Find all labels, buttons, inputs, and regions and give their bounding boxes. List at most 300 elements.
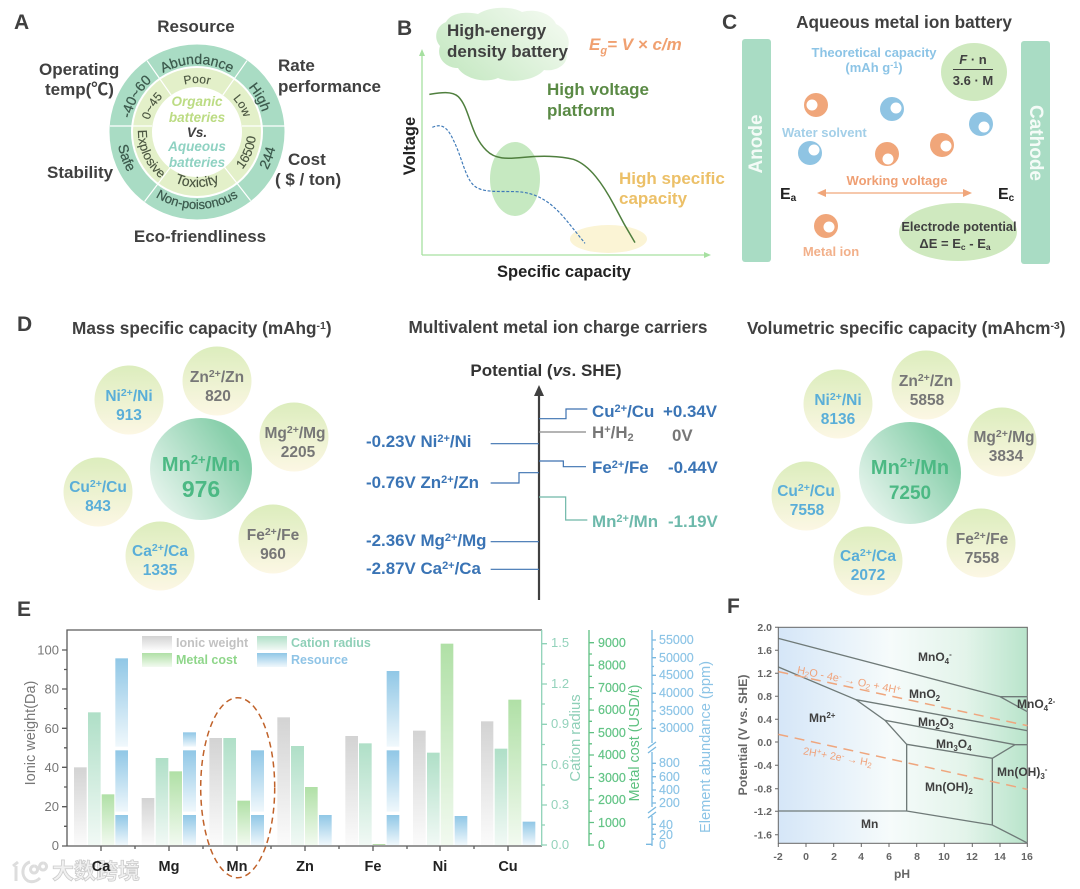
ring category labels: performance (278, 77, 381, 96)
panel C: aqueous battery (722, 11, 1050, 264)
mass capacity bubbles: /Mg (299, 425, 326, 442)
phase labels: 4 (945, 657, 950, 666)
element abundance axis: 600 (659, 770, 680, 784)
ring category labels (39, 17, 381, 246)
mass capacity bubbles: 2+ (265, 526, 277, 538)
panel B: voltage curve (397, 8, 725, 281)
electrode labels: E (998, 186, 1009, 203)
working voltage arrow: Working voltage (847, 173, 947, 188)
volumetric capacity bubbles: /Fe (986, 531, 1009, 548)
volumetric capacity title: Volumetric specific capacity (mAhcm (747, 318, 1050, 338)
mass capacity bubbles: /Ca (164, 543, 188, 560)
potential labels: 2+ (612, 459, 624, 471)
potential labels: 2+ (616, 513, 629, 525)
potential labels: 0V (672, 426, 693, 445)
legend: Cation radius (291, 636, 371, 650)
potential labels: -2.36V Mg (366, 531, 445, 550)
mass capacity bubbles: 843 (85, 498, 111, 515)
phase labels: 2 (935, 722, 940, 731)
volumetric capacity bubbles: 2+ (798, 482, 810, 494)
element abundance axis: 0 (659, 838, 666, 852)
ring chart (110, 44, 284, 220)
cation radius axis: Cation radius (568, 694, 584, 782)
ring chart: Poor (184, 75, 211, 84)
x tick labels: 8 (914, 851, 920, 863)
mass capacity title: -1 (317, 320, 326, 332)
phase labels: 2 (968, 787, 973, 796)
axis titles (736, 675, 910, 881)
plot background (778, 627, 1027, 843)
cation radius axis: 0.6 (551, 757, 569, 772)
x axis labels: Mn (227, 859, 247, 875)
y tick labels: 1.2 (757, 668, 772, 680)
cation radius axis: 0.0 (551, 837, 569, 852)
mass capacity bubbles: 2205 (281, 444, 316, 461)
mass capacity bubbles: /Zn (221, 369, 244, 386)
volumetric capacity bubbles: 5858 (910, 392, 945, 409)
panel A: comparison ring (14, 11, 381, 246)
panel D: capacities and potentials (17, 313, 1066, 600)
phase labels: 3 (953, 744, 958, 753)
working voltage arrow (817, 173, 972, 197)
potential labels: 2+ (615, 403, 627, 415)
mass capacity bubbles: Mg (264, 425, 287, 442)
volumetric capacity bubbles: 2+ (918, 372, 930, 384)
watermark (13, 859, 140, 884)
watermark: 大数跨境 (52, 859, 140, 884)
ring centre text (167, 94, 226, 170)
ring chart: 0~45 (142, 92, 162, 119)
axis titles: Potential (V vs. SHE) (736, 675, 750, 795)
mass capacity bubbles: 820 (205, 388, 231, 405)
panel letter A: A (14, 11, 29, 34)
mass capacity bubbles: Cu (69, 479, 90, 496)
element abundance axis: 35000 (659, 704, 694, 718)
potential labels: -0.23V Ni (366, 432, 437, 451)
potential labels: +0.34V (663, 402, 718, 421)
mass capacity bubbles: /Mn (206, 454, 240, 476)
reaction labels: + 2e (820, 749, 843, 764)
ring category labels: ( $ / ton) (275, 170, 341, 189)
axis titles: Specific capacity (497, 263, 632, 281)
volumetric capacity bubbles: 7558 (965, 550, 1000, 567)
y tick labels: 0.8 (757, 691, 772, 703)
volumetric capacity bubbles: Ca (840, 548, 860, 565)
element abundance axis: 200 (659, 796, 680, 810)
phase labels: - (949, 650, 952, 659)
ring chart: High (249, 82, 270, 112)
theoretical capacity: (mAh g (845, 60, 890, 75)
curve labels: platform (547, 101, 615, 120)
volumetric capacity bubbles: 7558 (790, 502, 825, 519)
formula bubble (941, 43, 1007, 101)
volumetric capacity bubbles: 2+ (830, 391, 842, 403)
left axis labels (23, 642, 59, 853)
mass capacity bubbles: 913 (116, 407, 142, 424)
mass capacity bubbles: 1335 (143, 562, 178, 579)
y tick labels: -0.4 (754, 760, 772, 772)
mass capacity bubbles: Mn (162, 454, 191, 476)
x axis labels: Zn (296, 859, 314, 875)
potential labels (366, 402, 718, 578)
y tick labels: 0.0 (757, 737, 772, 749)
y tick labels: 1.6 (757, 645, 772, 657)
panel title: Aqueous metal ion battery (796, 12, 1012, 32)
ring chart: Low (234, 94, 250, 116)
potential labels: /Mn (629, 512, 658, 531)
electrode labels: E (780, 186, 791, 203)
potential labels: -1.19V (668, 512, 718, 531)
axes (419, 49, 711, 258)
reaction labels (796, 663, 902, 770)
mass capacity bubbles: Zn (190, 369, 209, 386)
ring centre text: Vs. (187, 125, 207, 140)
mass capacity bubbles: /Cu (102, 479, 127, 496)
left axis labels: 80 (45, 682, 59, 696)
ring category labels: Eco-friendliness (134, 227, 266, 246)
x tick labels: 14 (994, 851, 1006, 863)
volumetric capacity bubbles: /Mg (1008, 429, 1035, 446)
phase labels: 2+ (826, 711, 836, 720)
y tick labels: -1.2 (754, 806, 772, 818)
metal cost axis: 4000 (598, 748, 626, 762)
legend: Ionic weight (176, 636, 249, 650)
volumetric capacity bubbles: Fe (956, 531, 974, 548)
volumetric capacity bubbles: /Zn (930, 373, 953, 390)
metal cost axis: 9000 (598, 636, 626, 650)
mass capacity bubbles: Ni (105, 388, 121, 405)
anode (742, 39, 771, 262)
volumetric capacity bubbles: 2072 (851, 567, 885, 584)
cathode: Cathode (1025, 105, 1046, 181)
x axis labels: Ni (433, 859, 447, 875)
metal ion label: Metal ion (803, 244, 859, 259)
element abundance axis: 55000 (659, 633, 694, 647)
ring chart: Toxicity (178, 174, 218, 188)
y tick labels: 2.0 (757, 622, 772, 634)
potential labels: /H (611, 423, 628, 442)
x tick labels: -2 (773, 851, 783, 863)
y tick labels (754, 622, 772, 842)
phase labels (809, 650, 1056, 831)
ring category labels: temp(℃) (45, 80, 114, 99)
left axis labels: 60 (45, 721, 59, 736)
reaction labels: O - 4e (808, 667, 840, 685)
ring centre text: batteries (169, 110, 226, 125)
panel letter F: F (727, 595, 740, 618)
panel letter C: C (722, 11, 737, 34)
x tick labels: 2 (831, 851, 837, 863)
phase labels: O (940, 715, 949, 729)
formula: = V × c/m (607, 35, 682, 54)
cation radius axis: 0.9 (551, 716, 569, 731)
mass capacity bubbles: 2+ (152, 542, 164, 554)
axis ticks (775, 627, 1027, 847)
volumetric capacity bubbles: 2+ (974, 530, 986, 542)
phase labels: MnO (909, 687, 936, 701)
volumetric capacity bubbles: /Mn (915, 457, 949, 479)
volumetric capacity bubbles: 2+ (996, 428, 1008, 440)
x tick labels: 4 (858, 851, 864, 863)
blue dashed curve (432, 126, 585, 243)
electrode potential bubble (899, 203, 1017, 261)
left axis labels: 0 (52, 838, 59, 853)
ring chart: 244 (260, 147, 276, 170)
cathode (1021, 41, 1050, 264)
panel E: bar chart (17, 598, 714, 878)
left axis labels: 20 (45, 799, 59, 814)
cation radius axis: 0.3 (551, 797, 569, 812)
potential labels: /Ni (450, 432, 472, 451)
potential labels: 2+ (442, 560, 455, 572)
ring centre text: batteries (169, 155, 226, 170)
formula bubble: F · n (959, 52, 987, 67)
potential axis title: Potential (vs. SHE) (470, 361, 622, 380)
mass capacity bubbles (64, 346, 328, 590)
cloud text: density battery (447, 42, 568, 61)
mass capacity bubbles: 2+ (287, 424, 299, 436)
electrode labels (780, 186, 1015, 204)
phase labels: 2 (936, 694, 941, 703)
ring chart: Explosive (137, 130, 164, 178)
metal cost axis: Metal cost (USD/t) (627, 685, 643, 801)
mass capacity bubbles: 2+ (90, 478, 102, 490)
mass capacity bubbles: 2+ (191, 452, 206, 467)
reaction labels: → O (840, 673, 867, 690)
cation radius axis (542, 630, 584, 852)
phase labels: Mn (809, 711, 826, 725)
phase labels: 4 (967, 744, 972, 753)
legend: Resource (291, 653, 348, 667)
ring category labels: Cost (288, 150, 326, 169)
metal cost axis: 6000 (598, 703, 626, 717)
volumetric capacity bubbles: Zn (899, 373, 918, 390)
electrode labels: c (1009, 193, 1015, 204)
mass capacity bubbles: /Fe (277, 527, 300, 544)
curve labels (547, 80, 725, 208)
reaction labels: + (896, 683, 902, 693)
cloud text (447, 21, 568, 61)
potential labels: -0.76V Zn (366, 473, 441, 492)
volumetric capacity bubbles: /Ni (842, 392, 862, 409)
metal cost axis: 3000 (598, 771, 626, 785)
potential labels: 2+ (441, 474, 454, 486)
theoretical capacity (812, 45, 937, 75)
green solid curve (429, 93, 635, 243)
phase labels: Mn (936, 737, 953, 751)
volumetric capacity title: ) (1060, 318, 1066, 338)
reaction labels: + (816, 747, 823, 757)
ring chart: Safe (118, 144, 134, 172)
chart frame and ticks (62, 630, 542, 851)
mass capacity title: Mass specific capacity (mAhg (72, 318, 317, 338)
volumetric capacity bubbles: Mg (973, 429, 996, 446)
panel letter B: B (397, 17, 412, 40)
ring chart: 16500 (237, 136, 256, 169)
formula: E (589, 35, 600, 54)
curve labels: High specific (619, 169, 725, 188)
reaction labels: 2 (866, 761, 873, 770)
phase labels: MnO (918, 650, 945, 664)
phase labels: Mn(OH) (997, 765, 1040, 779)
potential labels: -2.87V Ca (366, 559, 442, 578)
metal cost axis: 5000 (598, 726, 626, 740)
volumetric capacity bubbles: 2+ (900, 455, 915, 470)
potential labels: /Mg (457, 531, 486, 550)
reaction labels: + 4H (869, 679, 897, 696)
water solvent label: Water solvent (782, 125, 867, 140)
legend: Metal cost (176, 653, 238, 667)
potential labels: /Cu (627, 402, 654, 421)
element abundance axis: 50000 (659, 651, 694, 665)
phase labels: 2- (1048, 697, 1056, 706)
formula bubble: 3.6 · M (953, 73, 993, 88)
theoretical capacity: -1 (890, 60, 898, 70)
ring chart: Non-poisonous (156, 190, 238, 211)
y tick labels: -1.6 (754, 830, 772, 842)
x tick labels: 16 (1021, 851, 1033, 863)
mass capacity title: ) (326, 318, 332, 338)
electrode potential bubble: c (961, 242, 966, 252)
theoretical capacity: ) (898, 60, 903, 75)
mass capacity bubbles: Ca (132, 543, 152, 560)
x tick labels: 6 (886, 851, 892, 863)
axis titles: pH (894, 867, 910, 881)
potential labels: -0.44V (668, 458, 718, 477)
potential labels: Fe (592, 458, 612, 477)
volumetric capacity bubbles: 2+ (860, 547, 872, 559)
phase labels: Mn (861, 817, 878, 831)
potential labels: /Ca (455, 559, 482, 578)
panel letter D: D (17, 313, 32, 336)
phase labels: 4 (1044, 704, 1049, 713)
element abundance axis: 40000 (659, 686, 694, 700)
bars (74, 644, 535, 845)
metal cost axis: 1000 (598, 816, 626, 830)
left axis labels: Ionic weight(Da) (23, 681, 39, 785)
mass capacity bubbles: 976 (182, 476, 220, 502)
cation radius axis: 1.2 (551, 676, 569, 691)
potential labels: H (592, 423, 604, 442)
metal cost axis: 8000 (598, 658, 626, 672)
mass capacity bubbles: /Ni (133, 388, 153, 405)
ring chart: -40~60 (124, 76, 150, 118)
potential labels: + (604, 424, 611, 436)
ions and water (798, 93, 993, 238)
curve labels: capacity (619, 189, 688, 208)
legend (142, 636, 371, 667)
anode: Anode (746, 114, 767, 174)
volumetric capacity bubbles: 8136 (821, 411, 856, 428)
cloud (436, 8, 569, 81)
curve labels: High voltage (547, 80, 649, 99)
element abundance axis: 20 (659, 828, 673, 842)
metal cost axis (589, 630, 643, 852)
ring centre text: Organic (171, 94, 223, 109)
potential labels: 2 (628, 432, 634, 444)
element abundance axis: 45000 (659, 668, 694, 682)
phase labels: MnO (1017, 697, 1044, 711)
electrode potential bubble: a (986, 242, 991, 252)
reaction labels: 2 (804, 670, 810, 680)
potential labels: 2+ (445, 532, 457, 544)
ring category labels: Stability (47, 163, 114, 182)
reaction labels: - (838, 672, 843, 681)
metal cost axis: 2000 (598, 793, 626, 807)
x tick labels: 12 (966, 851, 978, 863)
highlight ellipses (490, 142, 647, 253)
multivalent title: Multivalent metal ion charge carriers (409, 317, 707, 337)
potential labels: /Zn (454, 473, 479, 492)
reaction labels: H (796, 664, 806, 678)
phase labels: O (958, 737, 967, 751)
reaction labels: - (841, 751, 846, 761)
ring chart: Abundance (162, 54, 233, 73)
potential labels: Cu (592, 402, 615, 421)
Mn highlight oval (201, 698, 275, 878)
element abundance axis: 30000 (659, 721, 694, 735)
y tick labels: 0.4 (757, 714, 772, 726)
formula: g (599, 45, 607, 57)
potential level lines (491, 409, 587, 569)
ring category labels: Rate (278, 56, 315, 75)
reaction labels: 2 (865, 682, 871, 692)
phase boundaries (778, 638, 1027, 843)
phase labels: 3 (949, 722, 954, 731)
mass capacity bubbles: 2+ (121, 387, 133, 399)
phase labels: 3 (1040, 772, 1045, 781)
electrode potential bubble: - E (966, 236, 986, 251)
potential labels: 2+ (437, 433, 450, 445)
x tick labels: 0 (803, 851, 809, 863)
mass capacity bubbles: Fe (247, 527, 265, 544)
axis titles: Voltage (401, 117, 419, 175)
panel F: Pourbaix diagram (727, 595, 1056, 881)
volumetric capacity bubbles: Ni (814, 392, 830, 409)
electrode potential bubble: ΔE = E (919, 236, 961, 251)
left axis labels: 100 (37, 642, 59, 658)
element abundance axis: 40 (659, 818, 673, 832)
reaction labels: 2H (802, 745, 817, 760)
volumetric capacity bubbles: /Ca (872, 548, 896, 565)
phase labels: - (1045, 765, 1048, 774)
x axis labels: Fe (365, 859, 381, 875)
volumetric capacity bubbles: /Cu (810, 483, 835, 500)
element abundance axis (646, 630, 714, 852)
x tick labels (773, 851, 1033, 863)
element abundance axis: Element abundance (ppm) (698, 661, 714, 833)
cloud text: High-energy (447, 21, 547, 40)
element abundance axis: 400 (659, 783, 680, 797)
ring category labels: Resource (157, 17, 235, 36)
axis titles (401, 117, 632, 281)
reaction labels: → H (843, 753, 869, 769)
volumetric capacity bubbles (772, 350, 1036, 596)
x axis labels: Cu (498, 859, 518, 875)
volumetric capacity bubbles: 3834 (989, 448, 1024, 465)
mass capacity bubbles: 2+ (209, 368, 221, 380)
left axis labels: 40 (45, 760, 59, 775)
potential axis arrow (534, 385, 544, 600)
potential labels: /Fe (624, 458, 649, 477)
volumetric capacity title: -3 (1050, 320, 1060, 332)
water stability lines (778, 672, 1027, 789)
electrode labels: a (791, 193, 797, 204)
x tick labels: 10 (938, 851, 950, 863)
metal cost axis: 7000 (598, 681, 626, 695)
volumetric capacity bubbles: Mn (871, 457, 900, 479)
mass capacity bubbles: 960 (260, 546, 286, 563)
